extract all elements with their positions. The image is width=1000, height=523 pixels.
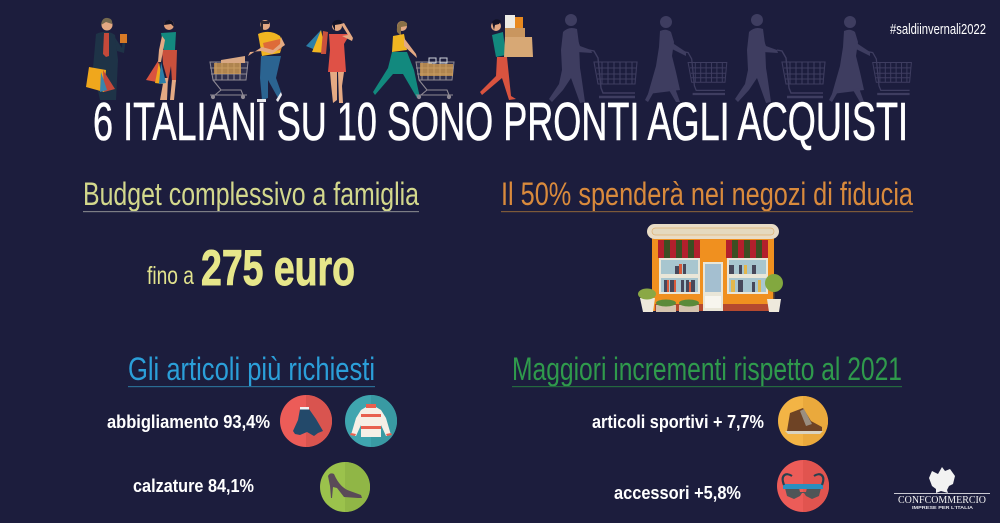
budget amount: 275 euro (201, 240, 355, 296)
label: abbigliamento: abbigliamento 93,4% (107, 412, 270, 432)
label: calzature: calzature 84,1% (133, 476, 254, 496)
shopper: businessman with bags (86, 18, 127, 100)
silhouette: woman with cart (829, 16, 911, 102)
shopper: bearded man in yellow (248, 20, 285, 102)
icon: sunglasses (777, 460, 829, 512)
plants (638, 274, 783, 312)
silhouette: man with cart (735, 14, 825, 103)
shop awnings (658, 240, 768, 258)
logo eagle (929, 467, 955, 493)
icon: sneaker (778, 396, 828, 446)
shopping cart with goods (210, 56, 248, 99)
icon: high heel (320, 462, 370, 512)
shopper: woman in teal trousers pushing cart (373, 21, 454, 99)
illustration: silhouettes with carts (549, 14, 911, 103)
shop windows (659, 258, 768, 294)
shopper: woman carrying boxes (480, 15, 533, 100)
heading: budget: Budget complessivo a famiglia (83, 176, 419, 212)
logo: Confcommercio: CONFCOMMERCIO (898, 495, 986, 506)
label: accessori: accessori +5,8% (614, 483, 741, 503)
illustration: shoppers (86, 15, 533, 103)
budget amount (147, 240, 355, 296)
budget amount: fino a (147, 262, 194, 290)
shopper: woman in teal with bags (146, 20, 177, 100)
shop door (703, 262, 723, 311)
logo: Confcommercio: IMPRESE PER L'ITALIA (912, 505, 974, 510)
illustration: shop (638, 224, 783, 312)
icon: skirt (280, 395, 332, 447)
shopper: woman in red dress with bags (306, 20, 353, 103)
silhouette: man with cart (549, 14, 637, 103)
logo: Confcommercio (894, 467, 990, 510)
silhouette: woman with cart (645, 16, 727, 102)
label: articoli sportivi: articoli sportivi + 7,7% (592, 412, 764, 432)
icon: sweater (345, 395, 397, 447)
heading: articoli richiesti: Gli articoli più richiesti (128, 351, 375, 387)
